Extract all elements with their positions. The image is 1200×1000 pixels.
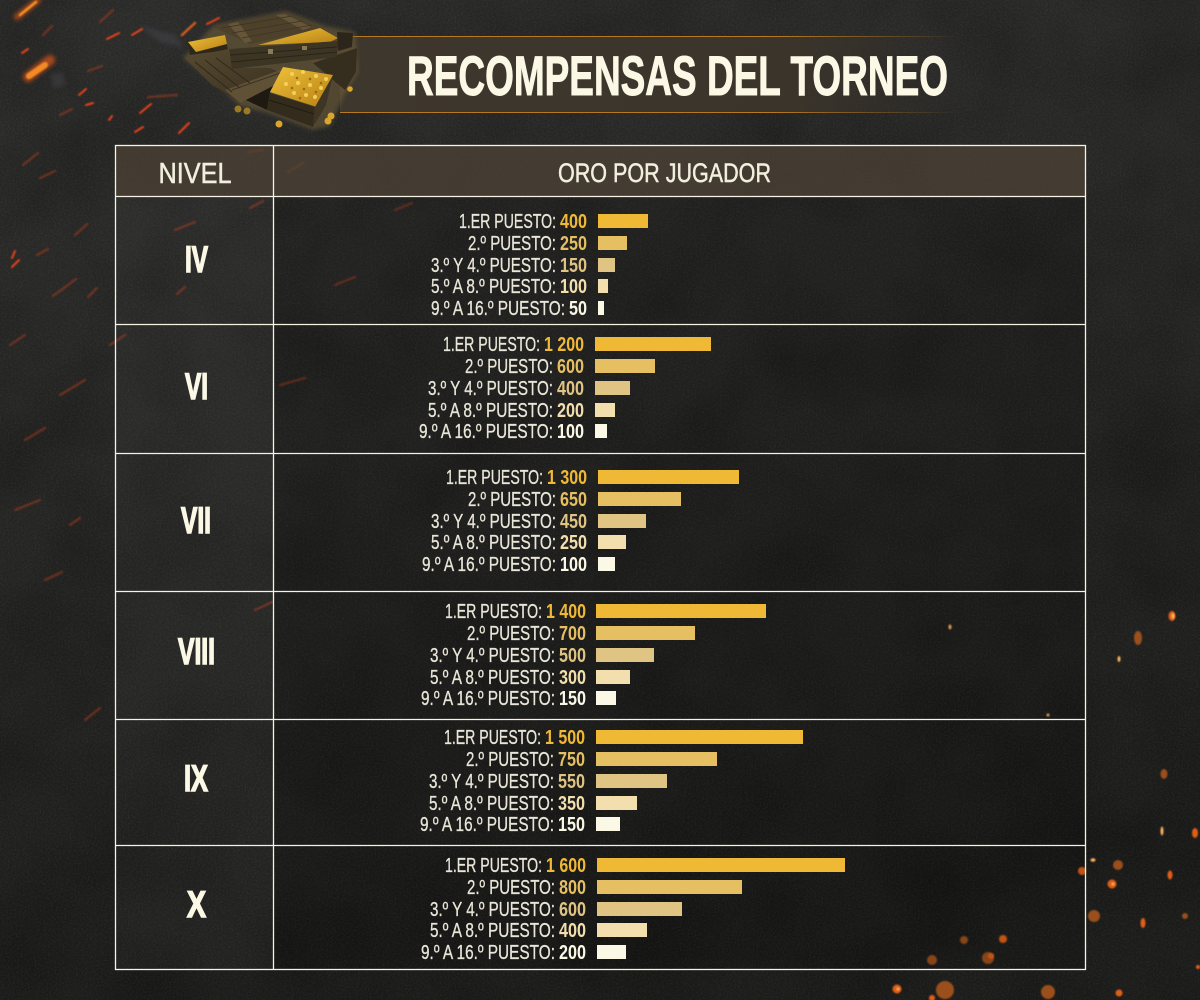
- rewards VIII: 300: [559, 667, 586, 689]
- rewards X: 600: [559, 899, 586, 921]
- rewards IV: 2.º PUESTO:: [468, 233, 556, 255]
- rewards X: 1 600: [546, 855, 586, 877]
- rewards VI: 5.º A 8.º PUESTO:: [428, 400, 553, 422]
- rewards VIII: 5.º A 8.º PUESTO:: [430, 667, 555, 689]
- rewards X: 1.ER PUESTO:: [445, 855, 542, 877]
- rewards VI: 9.º A 16.º PUESTO:: [419, 421, 553, 443]
- rewards VII: [422, 467, 739, 576]
- rewards VII: 3.º Y 4.º PUESTO:: [431, 511, 556, 533]
- rewards VIII: 2.º PUESTO:: [467, 623, 555, 645]
- rewards IX: 1 500: [545, 727, 585, 749]
- rewards VII: 450: [560, 511, 587, 533]
- rewards X: 400: [559, 920, 586, 942]
- level IV: IV: [185, 239, 208, 280]
- icon: crates of gold: [183, 11, 358, 130]
- rewards VIII: 150: [559, 688, 586, 710]
- rewards VII: 250: [560, 532, 587, 554]
- rewards VII: 1.ER PUESTO:: [446, 467, 543, 489]
- bottom crate gold: [270, 67, 333, 107]
- rewards VIII: 500: [559, 645, 586, 667]
- bottom crate side: [313, 75, 333, 127]
- rewards X: 5.º A 8.º PUESTO:: [430, 920, 555, 942]
- top crate side: [337, 32, 353, 51]
- rewards IX: 5.º A 8.º PUESTO:: [429, 793, 554, 815]
- rewards IX: 3.º Y 4.º PUESTO:: [429, 771, 554, 793]
- level VII: VII: [181, 500, 211, 541]
- back right crate: [313, 48, 357, 90]
- rewards VIII: 9.º A 16.º PUESTO:: [421, 688, 555, 710]
- rewards IV: 50: [569, 298, 587, 320]
- rewards VI: 1 200: [544, 334, 584, 356]
- rewards X: 3.º Y 4.º PUESTO:: [430, 899, 555, 921]
- rewards VII: 1 300: [547, 467, 587, 489]
- rewards X: 200: [559, 942, 586, 964]
- bottom crate front: [267, 93, 315, 127]
- top crate front: [229, 41, 338, 69]
- rewards IV: 5.º A 8.º PUESTO:: [431, 276, 556, 298]
- rewards VIII: 1 400: [546, 601, 586, 623]
- table: [116, 146, 1086, 970]
- rewards VII: 9.º A 16.º PUESTO:: [422, 554, 556, 576]
- rewards VI: 2.º PUESTO:: [465, 356, 553, 378]
- level IX: IX: [184, 758, 208, 799]
- rewards X: [421, 855, 845, 964]
- rewards IX: 350: [558, 793, 585, 815]
- rewards IV: 3.º Y 4.º PUESTO:: [431, 255, 556, 277]
- rewards VII: 5.º A 8.º PUESTO:: [431, 532, 556, 554]
- header: oro por jugador: ORO POR JUGADOR: [558, 158, 771, 188]
- rewards IX: [420, 727, 803, 836]
- background embers bottom right: [892, 611, 1200, 1000]
- top crate lid: [213, 13, 323, 44]
- background embers top left: [10, 10, 412, 720]
- rewards IX: 2.º PUESTO:: [466, 749, 554, 771]
- rewards IV: [431, 211, 648, 320]
- top crate gold: [258, 28, 338, 45]
- rewards X: 800: [559, 877, 586, 899]
- table header background: [116, 146, 1085, 196]
- rewards VII: 2.º PUESTO:: [468, 489, 556, 511]
- rewards IV: 9.º A 16.º PUESTO:: [431, 298, 565, 320]
- rewards VI: 400: [557, 378, 584, 400]
- rewards VII: 100: [560, 554, 587, 576]
- big left lid: [185, 49, 290, 103]
- rewards IX: 9.º A 16.º PUESTO:: [420, 814, 554, 836]
- table grid lines: [116, 146, 1086, 970]
- rewards VIII: [421, 601, 766, 710]
- loose coins: [234, 86, 353, 128]
- rewards IX: 750: [558, 749, 585, 771]
- rewards VIII: 1.ER PUESTO:: [445, 601, 542, 623]
- rewards IV: 400: [560, 211, 587, 233]
- rewards IV: 250: [560, 233, 587, 255]
- rewards X: 9.º A 16.º PUESTO:: [421, 942, 555, 964]
- header: nivel: NIVEL: [158, 158, 232, 190]
- rewards VI: 3.º Y 4.º PUESTO:: [428, 378, 553, 400]
- content column shading: [274, 197, 1085, 969]
- level column shading: [116, 197, 273, 969]
- level VI: VI: [185, 366, 208, 407]
- rewards IX: 1.ER PUESTO:: [444, 727, 541, 749]
- rewards IV: 1.ER PUESTO:: [459, 211, 556, 233]
- crate glow: [183, 11, 358, 130]
- rewards VI: [419, 334, 711, 443]
- rewards VI: 100: [557, 421, 584, 443]
- title banner: [340, 36, 960, 113]
- left small crate: [187, 35, 228, 55]
- rewards VII: 650: [560, 489, 587, 511]
- rewards IV: 150: [560, 255, 587, 277]
- shadow block: [210, 70, 290, 110]
- bright streak embers: [17, 0, 195, 77]
- rewards VIII: 700: [559, 623, 586, 645]
- rewards VI: 600: [557, 356, 584, 378]
- level VIII: VIII: [178, 631, 215, 672]
- rewards IX: 150: [558, 814, 585, 836]
- rewards X: 2.º PUESTO:: [467, 877, 555, 899]
- level X: X: [187, 884, 206, 925]
- rewards VIII: 3.º Y 4.º PUESTO:: [430, 645, 555, 667]
- rewards VI: 200: [557, 400, 584, 422]
- rewards IV: 100: [560, 276, 587, 298]
- rewards VI: 1.ER PUESTO:: [443, 334, 540, 356]
- rewards IX: 550: [558, 771, 585, 793]
